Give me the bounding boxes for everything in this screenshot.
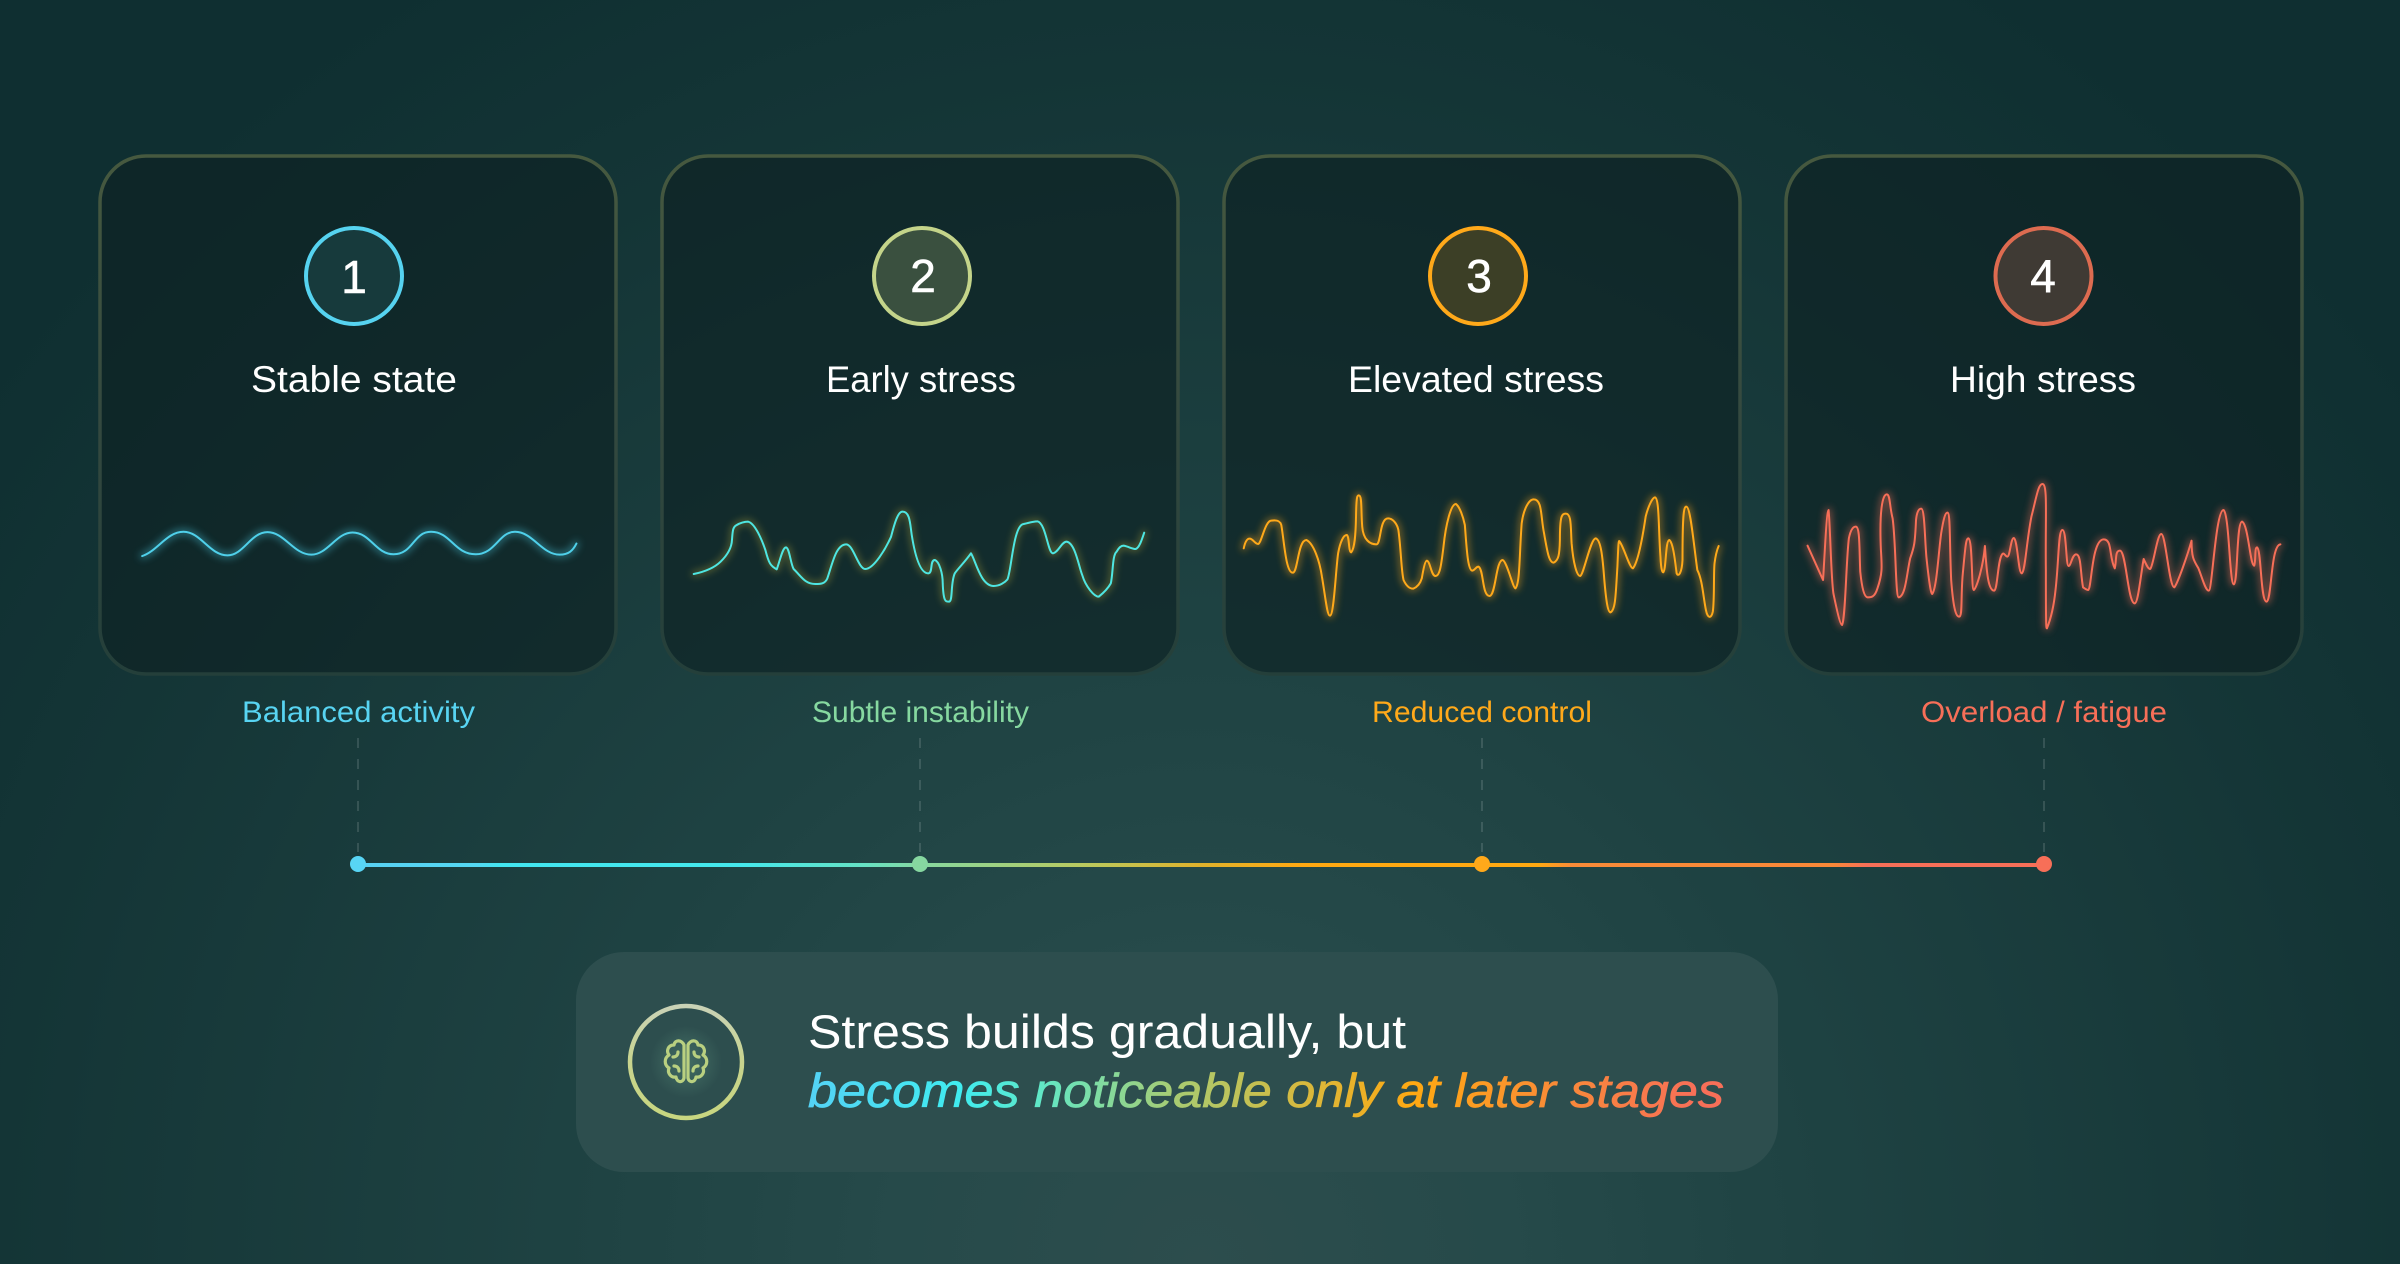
badge: number 1 [306,228,402,324]
label: subtle instability: Subtle instability [812,696,1029,729]
panel: stage 1 stable state [100,156,616,674]
text: summary gradient line: becomes noticeable only at later stages [808,1064,1724,1117]
label: balanced activity: Balanced activity [242,696,475,729]
panel: summary callout [576,952,1778,1172]
chart: irregular wave [1244,495,1719,617]
chart: calm wave [142,532,576,556]
heading: elevated stress: Elevated stress [1348,359,1604,400]
label: overload / fatigue: Overload / fatigue [1921,696,2167,729]
heading: early stress: Early stress [826,359,1016,400]
badge: number 2: 2 [910,250,936,302]
timeline: stress progression line with stage markers [350,856,2052,872]
panel: stage 4 high stress [1786,156,2302,674]
icon: brain in ring [630,1006,742,1118]
panel: stage 3 elevated stress [1224,156,1740,674]
panel: stage 2 early stress [662,156,1178,674]
text: summary first line: Stress builds gradually, but [808,1005,1406,1058]
heading: stable state: Stable state [251,359,457,400]
chart: slightly unstable wave [694,512,1144,602]
badge: number 4 [1996,228,2092,324]
badge: number 1: 1 [341,251,367,303]
label: reduced control: Reduced control [1372,696,1592,729]
badge: number 4: 4 [2030,250,2056,302]
badge: number 2 [874,228,970,324]
badge: number 3 [1430,228,1526,324]
chart: chaotic wave [1808,484,2280,628]
badge: number 3: 3 [1466,250,1492,302]
heading: high stress: High stress [1950,359,2136,400]
